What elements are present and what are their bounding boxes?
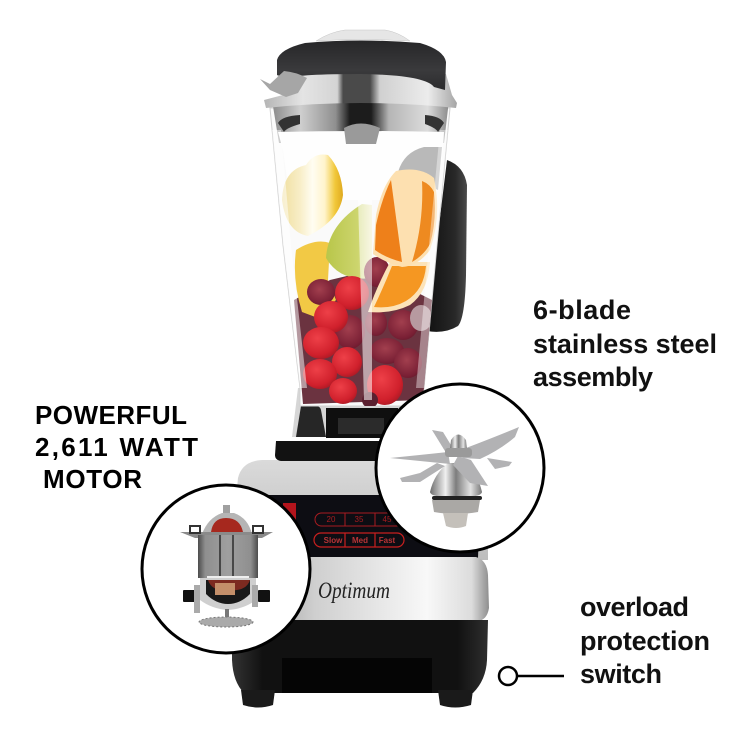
base silver top: [236, 460, 488, 560]
heading: motor: [35, 400, 198, 494]
speed buttons: Fast: [379, 536, 396, 545]
fruit: [272, 130, 448, 408]
stator core: [198, 535, 258, 578]
pear slice: [282, 154, 343, 236]
callout circle: motor: [142, 485, 310, 653]
copper terminals: [215, 583, 235, 595]
right dark opening: [425, 115, 444, 132]
threaded collar: [432, 500, 480, 514]
blender product photo: [232, 30, 489, 708]
orange slice upper: [373, 170, 437, 267]
heading: overload: overload: [580, 592, 689, 622]
steel blades: [390, 427, 519, 486]
jar handle: [427, 160, 467, 332]
jar interior dark top: [272, 100, 449, 143]
heading: blade: 6-blade: [533, 295, 631, 325]
jar highlights: [272, 130, 448, 400]
heading: overload: switch: [580, 659, 662, 689]
feet: [241, 690, 473, 708]
copper coil top: [211, 518, 243, 532]
green apple: [326, 204, 372, 279]
base recess: [282, 658, 432, 693]
bottom spline: [443, 513, 468, 528]
callout circle: blade: [376, 384, 544, 552]
motor dome: [202, 513, 252, 534]
motor shaft top: [223, 505, 230, 515]
jar rim: [264, 72, 457, 108]
timer buttons: 20: [327, 515, 336, 524]
motor illustration: [180, 505, 273, 627]
power switch: [283, 503, 296, 520]
timer buttons: [315, 513, 405, 526]
orange upper left flesh: [375, 180, 402, 262]
silver band: [240, 557, 489, 621]
washer: [445, 448, 472, 457]
orange lower flesh: [374, 266, 426, 307]
heading: blade: [533, 295, 717, 392]
cone: [430, 463, 482, 498]
heading: overload: protection: [580, 626, 710, 656]
brand name: Optimum: [318, 578, 390, 603]
yellow pear lower: [295, 242, 336, 318]
timer buttons: 45: [383, 515, 392, 524]
pour spout: [260, 71, 307, 97]
jar body: [270, 108, 450, 406]
motor flange: [180, 526, 273, 538]
fruit backdrop: [294, 270, 432, 404]
heading: blade: assembly: [533, 362, 653, 392]
red windings: [208, 580, 250, 590]
center agitator: [344, 124, 380, 144]
heading: overload: [580, 592, 710, 689]
speed buttons: Slow: [324, 536, 343, 545]
lower bracket: [200, 578, 256, 610]
heading: blade: stainless steel: [533, 329, 717, 359]
jar collar: [275, 388, 430, 461]
dark opening: [278, 115, 300, 132]
speed buttons: [314, 533, 404, 547]
orange slice lower: [368, 262, 430, 312]
see-through handle shadow: [398, 147, 442, 190]
side knobs: [183, 585, 270, 613]
shaft: [225, 609, 229, 619]
top nut cap: [450, 434, 467, 449]
speed buttons: Med: [352, 536, 368, 545]
black ring: [432, 496, 482, 500]
lid cap: [316, 30, 410, 41]
heading: motor: MOTOR: [43, 464, 142, 494]
pointer: overload switch: [499, 667, 564, 685]
jar inner white: [278, 131, 444, 200]
timer buttons: 35: [355, 515, 364, 524]
fan blade: [199, 617, 253, 627]
white insulator: [207, 576, 249, 580]
black lower base: [232, 620, 488, 693]
control panel: [262, 495, 480, 558]
blade assembly: [390, 427, 519, 528]
orange upper right flesh: [412, 181, 435, 262]
heading: motor: 2,611 WATT: [35, 432, 198, 462]
berries: [303, 257, 432, 408]
lid: [277, 40, 446, 90]
heading: motor: POWERFUL: [35, 400, 187, 430]
